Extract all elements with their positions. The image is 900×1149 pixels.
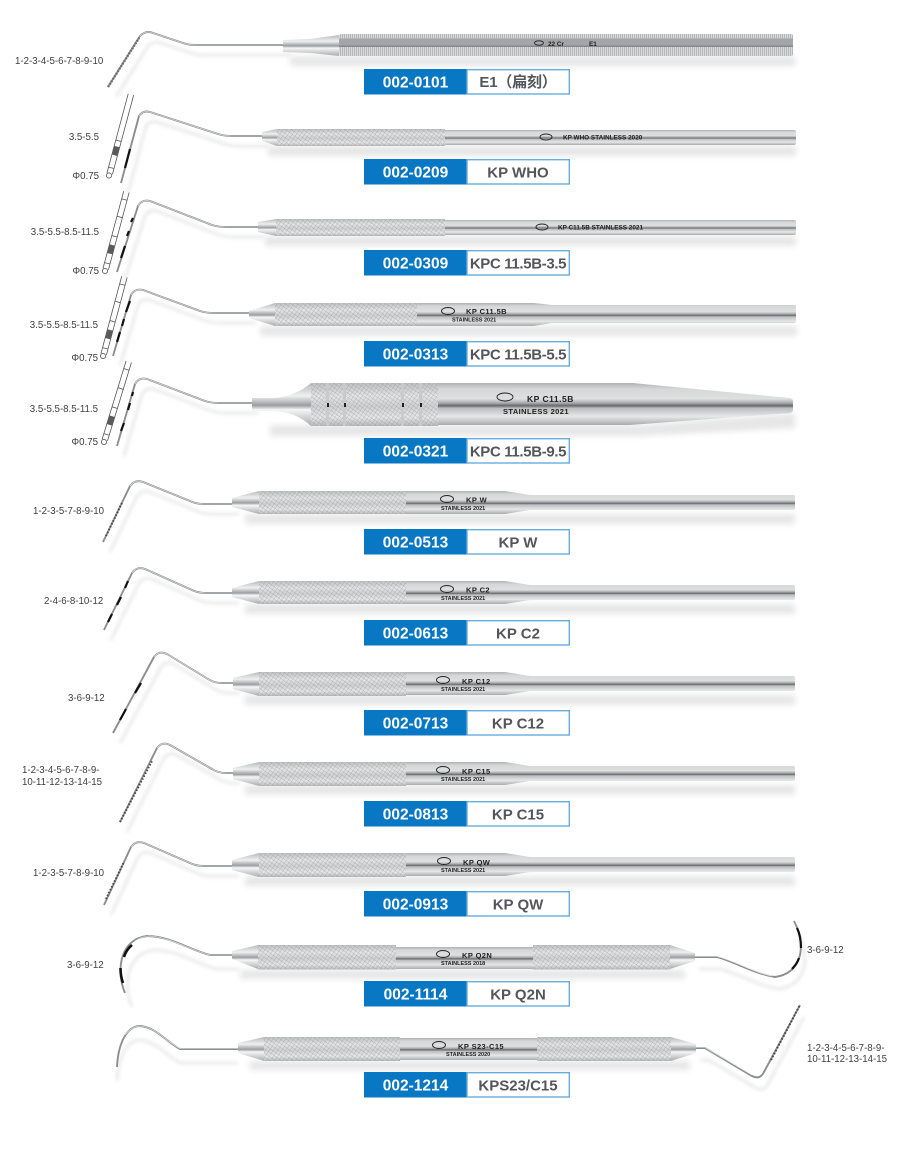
product label: E1（扁刻）: [479, 73, 557, 91]
instrument row: 002-1114: [67, 921, 844, 1007]
scale diagram: [106, 94, 134, 179]
instrument row: 002-0313: Φ0.75: [71, 353, 98, 364]
scale label: [22, 765, 102, 788]
product label: [364, 159, 569, 184]
scale labels: 3.5-5.5-8.5-11.5: [30, 404, 98, 415]
product label: 002-0913: [383, 896, 449, 914]
handle: [275, 303, 796, 326]
product label: 002-0309: [383, 256, 449, 272]
product label: [364, 69, 569, 94]
scale label: 1-2-3-4-5-6-7-8-9-: [22, 765, 100, 776]
handle: STAINLESS 2021: [441, 868, 485, 874]
handle: STAINLESS 2021: [441, 777, 485, 783]
product label: 002-0321: [383, 444, 449, 460]
instrument row: 002-0309: Φ0.75: [72, 266, 99, 277]
double-ended handle: [258, 945, 670, 970]
scale labels: 3.5-5.5-8.5-11.5: [31, 227, 99, 238]
product label: KP C2: [496, 626, 540, 642]
product label: [364, 438, 569, 464]
instrument row: 002-0321: [30, 361, 795, 464]
instrument row: 002-0209: [69, 94, 796, 193]
handle: [339, 34, 793, 56]
handle: KP WHO STAINLESS 2020: [563, 134, 643, 142]
product label: [364, 529, 569, 554]
left probe tip and wire: [120, 936, 232, 993]
scale diagram: [100, 276, 127, 359]
product label: [364, 710, 569, 736]
probe tip and wire: [113, 653, 233, 733]
handle: E1: [589, 41, 597, 48]
product label: 002-0513: [383, 534, 449, 552]
product label: [364, 620, 569, 646]
handle: KP C11.5B STAINLESS 2021: [558, 224, 643, 232]
probe tip and wire: [113, 290, 249, 356]
instrument row: 002-1214: [117, 1005, 887, 1098]
product label: KP WHO: [487, 164, 549, 182]
product label: [364, 981, 569, 1006]
instrument row: 002-0913: [33, 842, 795, 916]
handle: 22 Cr: [548, 41, 564, 48]
handle: STAINLESS 2021: [441, 506, 485, 512]
double-ended handle: [264, 1037, 671, 1061]
handle: KP W: [466, 496, 488, 504]
handle: [259, 491, 795, 514]
handle: [311, 383, 793, 426]
scale label: 10-11-12-13-14-15: [807, 1054, 887, 1065]
scale label: 1-2-3-5-7-8-9-10: [33, 868, 105, 879]
product label: [364, 891, 569, 916]
probe tip and wire: [108, 32, 283, 87]
instrument row: 002-0309: [31, 191, 796, 282]
scale labels: 3.5-5.5-8.5-11.5: [30, 320, 98, 331]
scale label: 1-2-3-4-5-6-7-8-9-10: [15, 56, 104, 67]
probe tip and wire: [121, 112, 262, 183]
product label: 002-0613: [383, 626, 449, 642]
handle: [259, 762, 795, 786]
product label: KP C15: [492, 806, 544, 824]
handle: KP QW: [463, 858, 491, 867]
scale labels: 3-6-9-12: [67, 960, 104, 971]
probe tip and wire: [117, 379, 252, 446]
handle: [259, 853, 795, 877]
double-ended handle: KP S23-C15: [458, 1042, 504, 1051]
product label: 002-1114: [384, 986, 448, 1004]
scale label: [807, 1043, 887, 1065]
scale diagram: [101, 361, 131, 445]
scale diagram: [102, 191, 129, 274]
product label: KP C12: [492, 716, 544, 732]
product label: KPC 11.5B-9.5: [470, 444, 566, 460]
instrument row: 002-0321: Φ0.75: [71, 437, 98, 448]
double-ended handle: KP Q2N: [462, 951, 492, 960]
double-ended handle: STAINLESS 2018: [441, 961, 485, 967]
instrument row: 002-0713: [68, 653, 795, 743]
handle: KP C2: [466, 586, 490, 594]
handle: KP C15: [462, 767, 491, 776]
instrument row: 002-0101: [15, 32, 795, 97]
instrument row: 002-0313: [30, 276, 797, 366]
left probe tip and wire: [117, 1026, 238, 1067]
product label: KP QW: [493, 896, 544, 914]
product label: 002-1214: [383, 1078, 449, 1094]
product label: [364, 341, 569, 366]
handle: STAINLESS 2021: [441, 596, 485, 602]
scale label: 1-2-3-4-5-6-7-8-9-: [807, 1043, 885, 1054]
handle: KP C12: [462, 677, 491, 686]
handle: [277, 129, 796, 146]
probe tip and wire: [120, 744, 233, 822]
product label: 002-0101: [383, 74, 449, 92]
probe tip and wire: [104, 568, 232, 630]
product label: [364, 1072, 569, 1098]
scale labels: 3.5-5.5: [69, 132, 99, 143]
product label: KPS23/C15: [478, 1078, 558, 1094]
right probe tip and wire: [695, 921, 801, 977]
handle: STAINLESS 2021: [441, 687, 485, 693]
instrument row: 002-0513: [33, 481, 795, 554]
product label: KPC 11.5B-5.5: [470, 346, 566, 364]
product label: 002-0813: [383, 806, 449, 824]
handle: [259, 581, 795, 604]
scale label: 1-2-3-5-7-8-9-10: [33, 506, 105, 517]
product label: 002-0209: [383, 164, 449, 182]
product label: KP Q2N: [490, 986, 546, 1004]
scale label: 10-11-12-13-14-15: [22, 777, 102, 788]
product label: KP W: [499, 534, 538, 552]
scale label: 3-6-9-12: [68, 693, 105, 704]
handle: STAINLESS 2021: [452, 318, 496, 324]
handle: KP C11.5B: [466, 307, 507, 316]
product label: [364, 801, 569, 826]
double-ended handle: STAINLESS 2020: [446, 1052, 490, 1058]
probe tip and wire: [104, 842, 232, 905]
right probe tip and wire: [696, 1005, 800, 1077]
handle: STAINLESS 2021: [503, 407, 569, 416]
handle: [276, 219, 796, 236]
product label: 002-0713: [383, 716, 449, 732]
product label: KPC 11.5B-3.5: [470, 256, 566, 272]
product label: [364, 250, 569, 276]
probe tip and wire: [103, 481, 232, 542]
instrument row: 002-0209: Φ0.75: [72, 171, 99, 182]
instrument row: 002-0813: [22, 744, 795, 832]
handle: [259, 672, 795, 696]
instrument row: 002-1114: 3-6-9-12: [807, 945, 844, 956]
scale label: 2-4-6-8-10-12: [44, 596, 103, 607]
instrument row: 002-0613: [44, 568, 795, 646]
handle: KP C11.5B: [527, 394, 574, 404]
probe tip and wire: [117, 201, 258, 272]
product label: 002-0313: [383, 346, 449, 364]
